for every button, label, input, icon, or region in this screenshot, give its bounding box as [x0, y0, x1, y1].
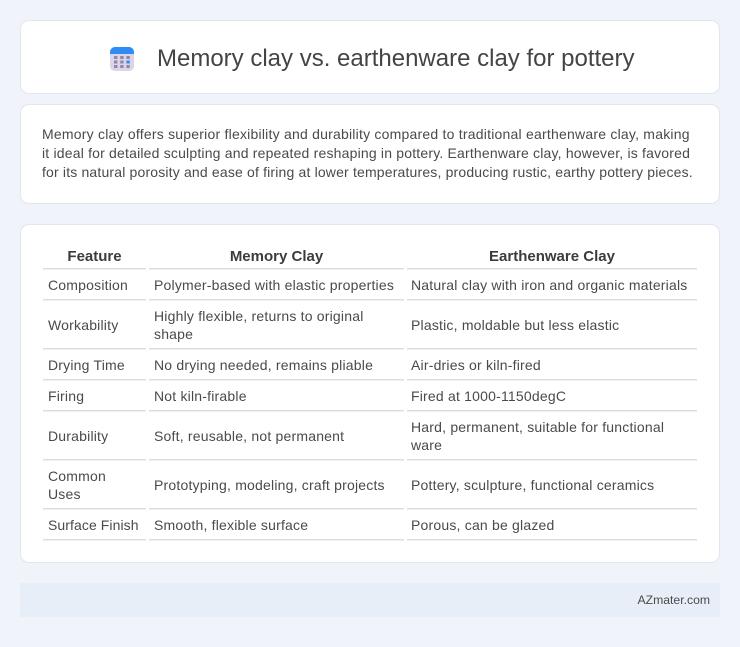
row: drying time: Air-dries or kiln-fired — [411, 357, 541, 373]
row: durability: Durability — [48, 428, 108, 444]
row: surface finish: Surface Finish — [48, 517, 139, 533]
column headers: Earthenware Clay — [489, 248, 615, 265]
row: drying time — [48, 357, 541, 373]
row: surface finish — [48, 517, 555, 533]
row: common uses: Common — [48, 468, 106, 484]
row: surface finish: Porous, can be glazed — [411, 517, 555, 533]
footer bar — [20, 583, 720, 617]
panel: title header — [20, 20, 720, 94]
row: firing: Fired at 1000-1150degC — [411, 388, 566, 404]
row: firing: Not kiln-firable — [154, 388, 247, 404]
row: firing — [48, 388, 566, 404]
row: drying time: Drying Time — [48, 357, 125, 373]
row: workability: shape — [154, 326, 193, 342]
intro paragraph: for its natural porosity and ease of firing at lower temperatures, producing rustic, earthy pottery pieces. — [42, 164, 693, 180]
column headers: Memory Clay — [230, 248, 323, 265]
row: durability: Hard, permanent, suitable for functional — [411, 419, 664, 435]
intro paragraph: it ideal for detailed sculpting and repeated reshaping in pottery. Earthenware clay, however, is favored — [42, 145, 690, 161]
row: workability: Workability — [48, 317, 118, 333]
title: Memory clay vs. earthenware clay for pottery — [157, 45, 635, 72]
row: durability — [48, 419, 664, 453]
row: workability: Highly flexible, returns to original — [154, 308, 364, 324]
icon: calendar — [110, 47, 134, 71]
column headers — [67, 248, 615, 265]
row: surface finish: Smooth, flexible surface — [154, 517, 308, 533]
row: durability: Soft, reusable, not permanent — [154, 428, 344, 444]
row: common uses: Uses — [48, 486, 81, 502]
row: firing: Firing — [48, 388, 84, 404]
intro paragraph: Memory clay offers superior flexibility and durability compared to traditional earthenware clay, making — [42, 126, 690, 142]
row: workability — [48, 308, 619, 342]
row: composition: Composition — [48, 277, 128, 293]
row: composition: Polymer-based with elastic properties — [154, 277, 394, 293]
footer text: source: AZmater.com — [638, 593, 710, 607]
row: drying time: No drying needed, remains pliable — [154, 357, 373, 373]
panel: comparison table — [20, 224, 720, 563]
row: workability: Plastic, moldable but less elastic — [411, 317, 619, 333]
row: common uses: Pottery, sculpture, functional ceramics — [411, 477, 654, 493]
row: composition — [48, 277, 687, 293]
comparison table — [43, 248, 697, 541]
row: common uses: Prototyping, modeling, craft projects — [154, 477, 385, 493]
column headers: Feature — [67, 248, 122, 265]
row: composition: Natural clay with iron and organic materials — [411, 277, 687, 293]
row: common uses — [48, 468, 654, 502]
row: durability: ware — [411, 437, 442, 453]
panel: intro text — [20, 104, 720, 204]
intro paragraph — [42, 126, 693, 180]
